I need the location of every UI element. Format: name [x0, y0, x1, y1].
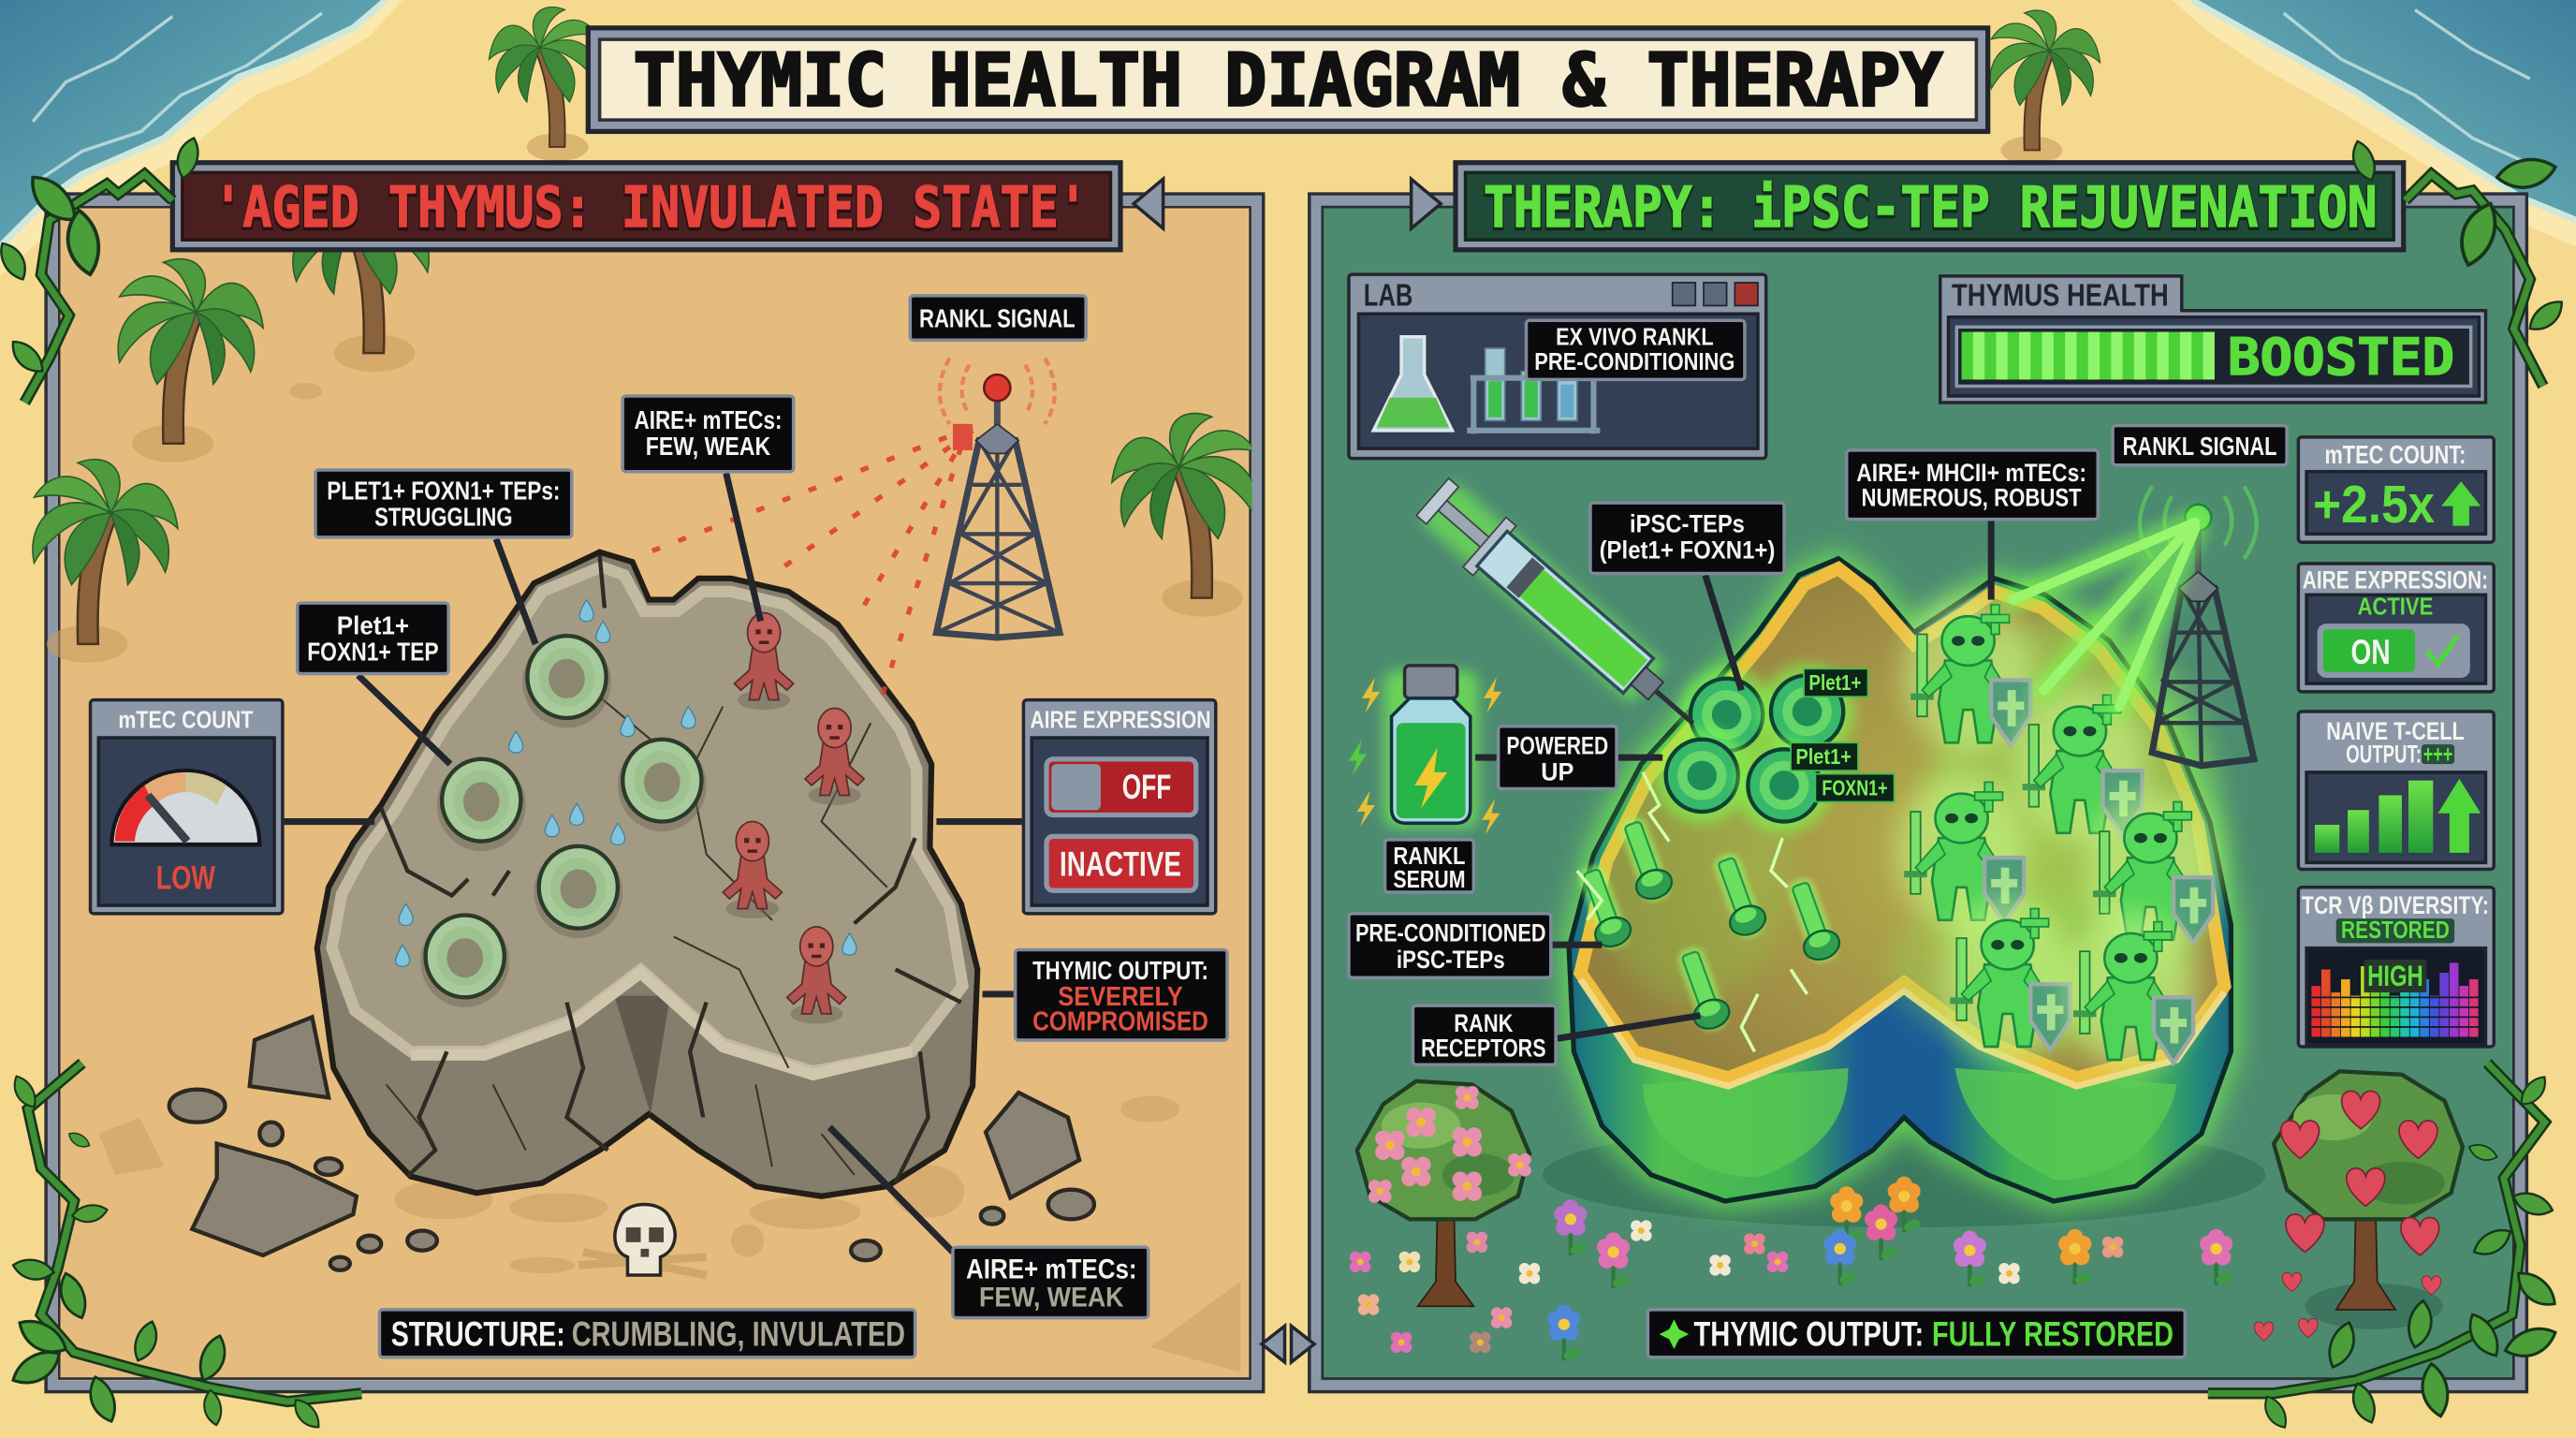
energy sparks: [1577, 772, 1808, 1051]
vine bottom left: [7, 1064, 361, 1432]
label: Plet1+ FOXN1+ TEP: FOXN1+ TEP: [307, 638, 439, 667]
label: thymic output compromised: [1016, 949, 1227, 1040]
RANKL tower: [936, 359, 1060, 638]
vine top right: [2348, 139, 2569, 386]
label: AIRE+ mTECs few weak: [622, 396, 794, 472]
label: RANKL signal therapy: [2113, 426, 2287, 465]
sparkle: [1660, 1319, 1689, 1349]
arrow: bottom link: [1262, 1326, 1314, 1362]
label: thymic output compromised: THYMIC OUTPUT:: [1032, 956, 1208, 985]
toggle on: [2320, 626, 2467, 675]
tags: Plet1+: [1795, 744, 1852, 769]
left panel header: [172, 163, 1120, 250]
bolts: [1349, 677, 1501, 835]
label: RANKL signal: [910, 296, 1086, 340]
label: Plet1+ FOXN1+ TEP: Plet1+: [337, 610, 409, 639]
panel: AIRE expression off: [1023, 700, 1216, 914]
label: RANKL signal: RANKL SIGNAL: [919, 303, 1076, 332]
label: thymic output compromised: SEVERELY: [1058, 982, 1183, 1012]
banner: structure: [379, 1310, 915, 1357]
palm tree top left: [489, 7, 599, 161]
toggle off: OFF: [1122, 768, 1171, 806]
banner: structure: CRUMBLING, INVULATED: [572, 1314, 905, 1353]
mTEC soldiers: [1895, 594, 2217, 1070]
label: AIRE+ MHCII+ mTECs: AIRE+ MHCII+ mTECs:: [1856, 458, 2086, 487]
panel: AIRE expression on: [2298, 564, 2494, 692]
thymus health bar: [1940, 276, 2485, 403]
bar chart: [2315, 779, 2481, 853]
tags: FOXN1+: [1822, 775, 1888, 800]
flask: [1373, 337, 1453, 431]
label: AIRE+ mTECs bottom: AIRE+ mTECs:: [966, 1254, 1137, 1284]
palm tree top right: [1990, 10, 2100, 165]
test tubes: [1467, 348, 1600, 433]
banner: thymic output restored: [1647, 1310, 2185, 1357]
thymus health bar: THYMUS HEALTH: [1952, 278, 2169, 313]
panel: mTEC count gauge: LOW: [156, 860, 216, 897]
rubble rocks: [169, 1017, 1094, 1270]
panel: TCR diversity: RESTORED: [2341, 916, 2450, 944]
label: Plet1+ FOXN1+ TEPs struggling: [315, 470, 572, 537]
banner: structure: STRUCTURE:: [391, 1314, 565, 1353]
banner: thymic output restored: THYMIC OUTPUT:: [1694, 1314, 1924, 1353]
panel: mTEC count +2.5x: +2.5x: [2313, 475, 2435, 534]
label: iPSC-TEPs: iPSC-TEPs: [1630, 509, 1745, 538]
arrow up: [2441, 481, 2481, 526]
left panel header: 'AGED THYMUS: INVULATED STATE': [213, 176, 1088, 241]
vine bottom right: [2208, 1064, 2561, 1431]
label: RANKL serum: [1385, 840, 1473, 893]
lab window: [1349, 274, 1766, 459]
label: RANKL serum: RANKL: [1393, 842, 1466, 870]
label: AIRE+ mTECs bottom: FEW, WEAK: [979, 1282, 1124, 1313]
label: iPSC-TEPs: [1590, 503, 1784, 574]
label: AIRE+ mTECs bottom: [953, 1247, 1149, 1318]
cracks: [381, 555, 961, 1183]
flower meadow: [1350, 1177, 2232, 1360]
label: Plet1+ FOXN1+ TEPs struggling: STRUGGLING: [374, 503, 513, 532]
palm trees in panel: [33, 169, 1257, 663]
panel: mTEC count gauge: mTEC COUNT: [118, 708, 254, 734]
thymus health bar: BOOSTED: [2228, 328, 2454, 387]
toggle on: ON: [2351, 633, 2391, 671]
panel: TCR diversity: TCR Vβ DIVERSITY:: [2302, 890, 2489, 919]
progress segments: [1962, 332, 2215, 379]
label: pre-conditioned iPSC-TEPs: PRE-CONDITIONED: [1355, 918, 1546, 947]
label: RANK receptors: RANK: [1454, 1008, 1514, 1037]
receptors: [1572, 813, 1844, 1036]
panel: AIRE expression on: AIRE EXPRESSION:: [2303, 565, 2488, 594]
label: pre-conditioned iPSC-TEPs: iPSC-TEPs: [1397, 945, 1505, 974]
label: RANK receptors: [1412, 1005, 1556, 1064]
connector lines: [285, 473, 1022, 1252]
weak mTEC figures: [723, 613, 864, 1023]
right panel header: [1456, 163, 2404, 250]
connector lines therapy: [1475, 521, 1991, 1038]
TEP cells: [420, 636, 707, 1007]
panel: mTEC count +2.5x: mTEC COUNT:: [2324, 440, 2466, 469]
arrow: left panel connector: [1134, 179, 1257, 1339]
panel: TCR diversity: HIGH: [2367, 959, 2423, 992]
label: powered up: [1499, 726, 1617, 788]
label: powered up: UP: [1541, 757, 1573, 786]
green signal beams: [2012, 522, 2195, 707]
title banner: [588, 28, 1988, 131]
red signal dashes: [640, 424, 973, 707]
tags: [1791, 668, 1895, 801]
serum bottle: [1349, 666, 1501, 835]
lab window: LAB: [1364, 278, 1412, 313]
label: ex vivo: [1526, 320, 1745, 379]
vine top left: [0, 136, 202, 403]
sand patches: [98, 383, 1240, 1372]
panel: TCR diversity: [2298, 888, 2494, 1047]
panel: naive T-cell output: NAIVE T-CELL: [2326, 716, 2465, 745]
banner: thymic output restored: FULLY RESTORED: [1932, 1314, 2174, 1353]
panel: therapy: [1310, 194, 2526, 1392]
label: RANK receptors: RECEPTORS: [1421, 1034, 1546, 1063]
label: RANKL serum: SERUM: [1393, 865, 1466, 893]
panel: AIRE expression on: ACTIVE: [2358, 592, 2433, 620]
panel: AIRE expression off: AIRE EXPRESSION: [1030, 708, 1211, 734]
RANKL tower therapy: [2140, 487, 2257, 766]
left panel header: 'AGED THYMUS: INVULATED STATE': [213, 178, 1088, 242]
label: ex vivo: EX VIVO RANKL: [1556, 323, 1714, 351]
label: thymic output compromised: COMPROMISED: [1032, 1006, 1208, 1036]
spectrum: [2311, 962, 2479, 1036]
iPSC cells: [1654, 664, 1855, 833]
label: AIRE+ MHCII+ mTECs: NUMEROUS, ROBUST: [1862, 483, 2082, 512]
label: AIRE+ mTECs few weak: AIRE+ mTECs:: [634, 405, 782, 434]
panel: naive T-cell output: +++: [2423, 739, 2452, 768]
aged thymus organ: [317, 552, 977, 1196]
sea top left: [0, 0, 402, 276]
arrow: right panel connector: [1316, 179, 1441, 1339]
inactive tag: INACTIVE: [1060, 844, 1181, 883]
label: AIRE+ MHCII+ mTECs: [1847, 450, 2098, 520]
panel: naive T-cell output: [2298, 712, 2494, 869]
therapy thymus organ: [1543, 559, 2265, 1227]
title text: THYMIC HEALTH DIAGRAM & THERAPY: [634, 38, 1943, 123]
label: RANKL signal therapy: RANKL SIGNAL: [2123, 432, 2277, 461]
panel: mTEC count +2.5x: [2298, 437, 2494, 542]
syringe: [1411, 472, 1715, 748]
sea top right: [2172, 0, 2576, 246]
panel: mTEC count gauge: [91, 700, 283, 914]
label: Plet1+ FOXN1+ TEP: [298, 603, 448, 674]
water drops: [396, 600, 856, 966]
label: pre-conditioned iPSC-TEPs: [1349, 914, 1551, 977]
gauge: [111, 770, 259, 844]
label: AIRE+ mTECs few weak: FEW, WEAK: [646, 432, 771, 461]
flower tree: [1357, 1081, 1531, 1306]
label: iPSC-TEPs: (Plet1+ FOXN1+): [1600, 536, 1775, 565]
right panel header: THERAPY: iPSC-TEP REJUVENATION: [1484, 176, 2378, 241]
panel: aged thymus: [33, 169, 1264, 1392]
panel: naive T-cell output: OUTPUT:: [2346, 739, 2422, 768]
toggle off: [1046, 759, 1196, 815]
label: Plet1+ FOXN1+ TEPs struggling: PLET1+ FOXN1+ TEPs:: [327, 477, 560, 506]
heart tree: [2254, 1071, 2463, 1341]
skull: [578, 1204, 707, 1275]
inactive tag: [1046, 836, 1196, 890]
right panel header: THERAPY: iPSC-TEP REJUVENATION: [1484, 178, 2378, 242]
label: powered up: POWERED: [1506, 731, 1608, 760]
tags: Plet1+: [1808, 670, 1862, 695]
label: ex vivo: PRE-CONDITIONING: [1534, 347, 1734, 375]
